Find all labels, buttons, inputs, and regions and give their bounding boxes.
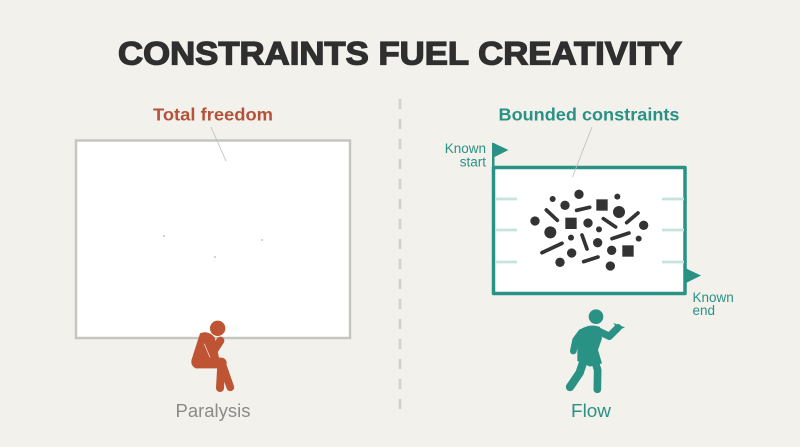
icon: seated thinking figure — [191, 321, 230, 388]
bounded canvas — [494, 168, 685, 294]
panel: total freedom — [76, 104, 350, 421]
leader line — [211, 127, 226, 161]
label: known end: Known — [692, 290, 734, 305]
scattered shapes — [530, 190, 648, 271]
panel: bounded constraints — [445, 104, 734, 421]
label: known start: start — [460, 154, 486, 170]
label: known end: end — [692, 303, 715, 318]
start flag — [492, 142, 508, 168]
heading: total freedom: Total freedom — [153, 104, 273, 124]
sparse dots — [163, 235, 263, 258]
leader line — [572, 127, 592, 177]
end flag — [685, 268, 701, 284]
heading: bounded constraints: Bounded constraints — [498, 104, 680, 124]
label: known start: Known — [445, 141, 486, 156]
icon: walking figure — [570, 309, 625, 389]
guide ticks — [495, 199, 684, 262]
title: CONSTRAINTS FUEL CREATIVITY — [118, 36, 682, 72]
label: flow: Flow — [571, 401, 612, 421]
empty canvas — [76, 140, 350, 338]
label: paralysis: Paralysis — [176, 401, 250, 421]
